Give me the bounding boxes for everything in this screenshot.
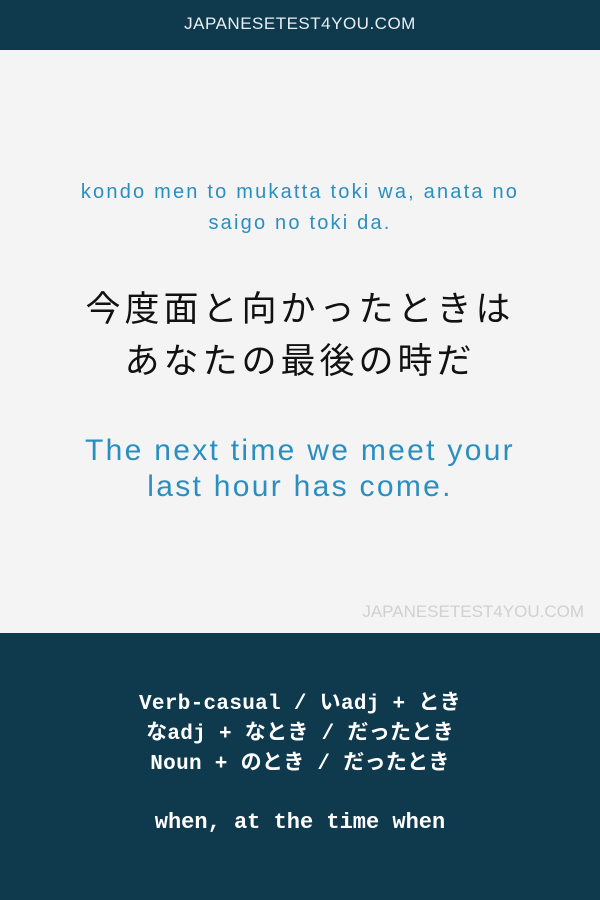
romaji text: saigo no toki da. <box>208 212 392 234</box>
japanese sentence: あなたの最後の時だ <box>124 342 476 381</box>
grammar panel: Verb-casual / いadj + とき <box>139 693 461 716</box>
romaji text <box>81 181 519 234</box>
grammar panel: Noun + のとき / だったとき <box>150 753 450 776</box>
grammar panel <box>139 692 461 776</box>
romaji text: kondo men to mukatta toki wa, anata no <box>81 181 519 203</box>
header bar <box>0 0 600 50</box>
japanese sentence: 今度面と向かったときは <box>85 290 514 329</box>
watermark: JAPANESETEST4YOU.COM <box>362 602 584 621</box>
meaning: when, at the time when <box>155 810 445 835</box>
japanese sentence <box>85 290 514 381</box>
main panel <box>0 50 600 633</box>
grammar panel: なadj + なとき / だったとき <box>146 723 454 746</box>
english translation: last hour has come. <box>147 470 453 503</box>
english translation <box>85 434 515 503</box>
header bar: JAPANESETEST4YOU.COM <box>184 14 416 33</box>
english translation: The next time we meet your <box>85 434 515 467</box>
